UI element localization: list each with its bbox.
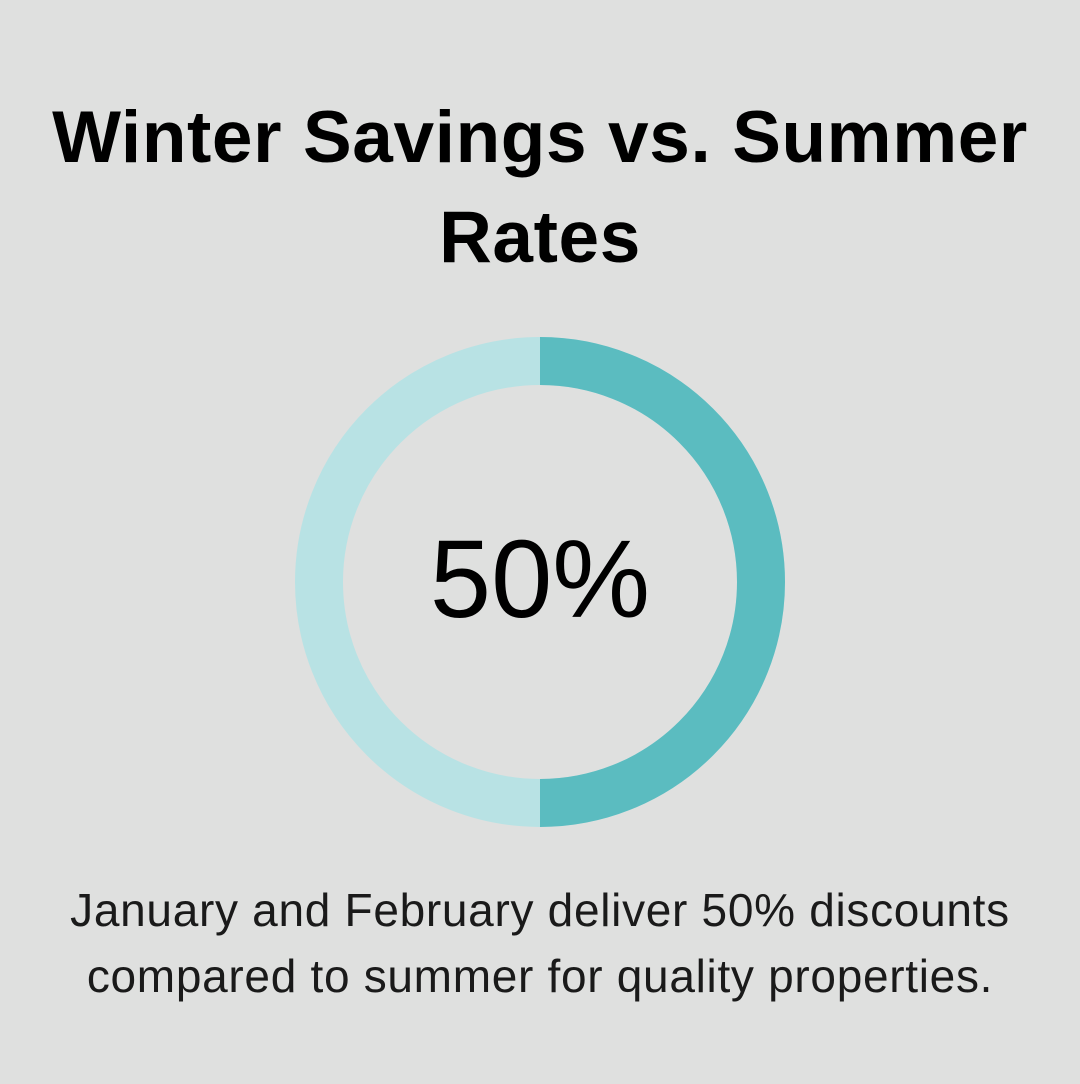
title: Rates [439, 197, 641, 278]
caption: compared to summer for quality properties. [87, 950, 993, 1002]
title [52, 97, 1028, 278]
big percentage: 50% [430, 518, 650, 641]
caption: January and February deliver 50% discounts [70, 884, 1010, 936]
title: Winter Savings vs. Summer [52, 97, 1028, 178]
ring value 50% [540, 361, 761, 803]
ring background [319, 361, 761, 803]
caption [70, 884, 1010, 1002]
